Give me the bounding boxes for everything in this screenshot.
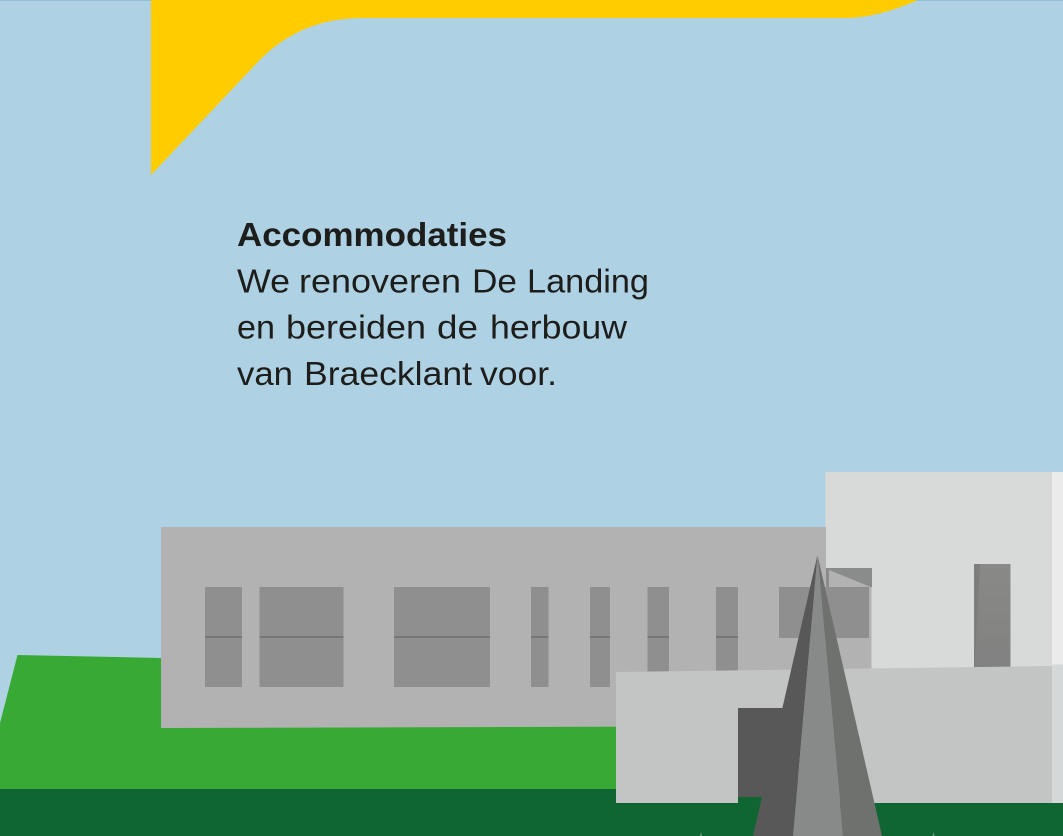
heading: Accommodaties xyxy=(237,217,507,254)
spire sculpture xyxy=(753,555,882,836)
body text: De xyxy=(472,264,517,300)
yellow ribbon shape xyxy=(151,0,918,175)
dark green ground notch xyxy=(738,797,798,803)
text block: accommodaties xyxy=(237,217,649,393)
dark green foreground xyxy=(0,789,1063,836)
body text: voor. xyxy=(480,356,557,393)
body text: Braecklant xyxy=(304,356,473,393)
front low building xyxy=(616,664,1063,803)
small grass tips xyxy=(700,832,934,836)
body text: de xyxy=(437,310,478,346)
body text: herbouw xyxy=(490,310,628,346)
body text: renoveren xyxy=(299,264,461,300)
grey long building xyxy=(161,527,872,728)
body text: van xyxy=(237,356,293,393)
green lawn xyxy=(0,655,640,790)
body text xyxy=(237,264,649,393)
body text: en xyxy=(237,310,275,346)
door in white building xyxy=(974,564,1010,668)
windows xyxy=(205,587,869,687)
body text: We xyxy=(237,264,290,300)
roof wedge xyxy=(826,568,872,600)
white building xyxy=(826,472,1063,670)
body text: Landing xyxy=(527,264,649,300)
window dividers xyxy=(205,636,738,638)
dark entrance xyxy=(738,708,798,797)
body text: bereiden xyxy=(286,310,426,346)
